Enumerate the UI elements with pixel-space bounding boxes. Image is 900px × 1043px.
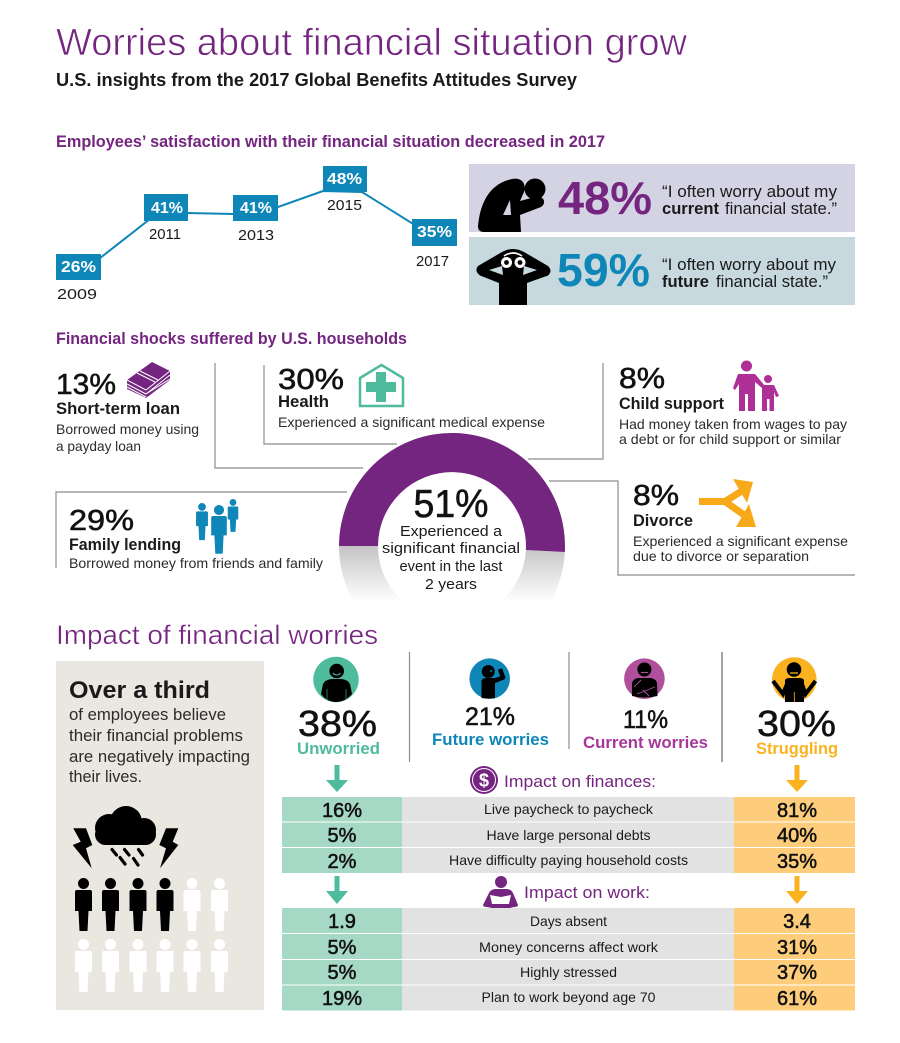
heading: impact on finances: [470, 766, 656, 794]
donut label: event in the last: [400, 558, 503, 575]
shock: short-term loan: Borrowed money using: [56, 421, 199, 437]
callout text: their lives.: [69, 768, 142, 786]
shock: family lending: [69, 499, 323, 571]
panel: current worry: [469, 164, 855, 232]
row: large personal debts: 5%: [328, 825, 357, 847]
shock: short-term loan: [56, 362, 199, 454]
row: difficulty paying household costs: Have difficulty paying household costs: [449, 852, 688, 868]
row: live paycheck to paycheck: 81%: [777, 800, 817, 822]
row: days absent: Days absent: [530, 913, 607, 929]
shock: divorce: [633, 479, 848, 564]
group: struggling: [756, 657, 838, 758]
callout heading: Over a third: [69, 677, 210, 704]
row: highly stressed: 5%: [328, 962, 357, 984]
icon: stack of money: [127, 362, 170, 398]
row: plan to work beyond age 70: Plan to work beyond age 70: [482, 989, 656, 1005]
column dividers: [410, 652, 722, 762]
label: future worries: Future worries: [432, 731, 549, 749]
data point 2013: [233, 195, 278, 244]
data point 2015: [323, 166, 367, 214]
row: difficulty paying household costs: 2%: [328, 851, 357, 873]
quote: future: “I often worry about my: [662, 256, 837, 274]
donut label: [382, 483, 520, 593]
shock: short-term loan: Short-term loan: [56, 400, 180, 418]
shock: child support: Had money taken from wages to pay: [619, 416, 847, 432]
shock: health: Health: [278, 393, 329, 411]
row: days absent: 1.9: [328, 911, 356, 933]
stat: 48%: 48%: [558, 172, 652, 224]
icon: smiling person: [313, 657, 359, 702]
icon: person looking ahead: [469, 658, 510, 699]
data point 2013: 2013: [238, 227, 274, 244]
data point 2017: 2017: [416, 253, 449, 270]
callout text: of employees believe: [69, 706, 226, 724]
row: highly stressed: [328, 962, 817, 984]
title: Worries about financial situation grow: [56, 22, 688, 64]
quote: current: current: [662, 200, 719, 218]
icon: person with binoculars: [476, 249, 550, 305]
shock: divorce: 8%: [633, 480, 679, 512]
row: large personal debts: [328, 825, 817, 847]
icon: person with head down: [478, 178, 546, 232]
panel: over a third: [56, 661, 264, 1010]
stat: 38%: 38%: [298, 703, 377, 744]
arrow: struggling to finances: [786, 765, 808, 792]
row: large personal debts: 40%: [777, 825, 817, 847]
icon: three people: [196, 499, 238, 554]
line chart: satisfaction by year: [56, 166, 457, 303]
stat: 21%: 21%: [465, 703, 515, 731]
arrow: unworried to finances: [326, 765, 348, 792]
shock: divorce: Experienced a significant expense: [633, 533, 848, 549]
heading: financial shocks: Financial shocks suffered by U.S. households: [56, 330, 407, 348]
donut label: Experienced a: [400, 523, 503, 540]
row: plan to work beyond age 70: 61%: [777, 988, 817, 1010]
data point 2017: 35%: [417, 224, 452, 241]
data point 2011: 41%: [151, 200, 183, 217]
data point 2015: 48%: [327, 171, 362, 188]
panel: future worry: [469, 237, 855, 305]
icon: storm cloud: [73, 806, 178, 868]
icon: person with folded arms: [624, 658, 665, 699]
row: money concerns affect work: [328, 937, 817, 959]
data point 2015: 2015: [327, 197, 362, 214]
heading: impact of financial worries: Impact of financial worries: [56, 620, 378, 650]
shock: health: Experienced a significant medical expense: [278, 414, 545, 430]
arrow: unworried to work: [326, 876, 348, 904]
data point 2011: 2011: [149, 226, 181, 243]
table: impact on finances: [282, 797, 855, 873]
row: money concerns affect work: 31%: [777, 937, 817, 959]
stat: 11%: 11%: [623, 706, 668, 734]
heading: impact on work: Impact on work:: [524, 884, 650, 902]
stat: 59%: 59%: [557, 244, 650, 296]
row: days absent: 3.4: [783, 911, 811, 933]
data point 2009: [56, 254, 101, 303]
connector lines: [56, 363, 855, 575]
donut chart: 51%: [339, 433, 565, 659]
quote: future: financial state.”: [716, 273, 828, 291]
arrow: struggling to work: [786, 876, 808, 904]
row: difficulty paying household costs: 35%: [777, 851, 817, 873]
shock: health: 30%: [278, 364, 344, 396]
quote: current: financial state.”: [725, 200, 837, 218]
shock: divorce: due to divorce or separation: [633, 548, 809, 564]
stat: 30%: 30%: [757, 703, 836, 744]
icon: dollar coin: $: [479, 770, 489, 790]
heading: impact on finances: Impact on finances:: [504, 773, 656, 791]
shock: child support: Child support: [619, 395, 724, 413]
icon: splitting arrow: [699, 479, 756, 527]
label: unworried: Unworried: [297, 740, 380, 758]
row: plan to work beyond age 70: 19%: [322, 988, 362, 1010]
row: difficulty paying household costs: [328, 851, 817, 873]
shock: family lending: Family lending: [69, 536, 181, 554]
donut label: significant financial: [382, 540, 520, 557]
callout text: are negatively impacting: [69, 748, 250, 766]
data point 2009: 2009: [57, 286, 97, 303]
row: highly stressed: Highly stressed: [520, 964, 617, 980]
row: live paycheck to paycheck: [322, 800, 817, 822]
shock: child support: [619, 360, 847, 447]
shock: short-term loan: 13%: [56, 369, 116, 401]
table: impact on work: [282, 908, 855, 1010]
data point 2017: [412, 219, 457, 270]
data point 2013: 41%: [240, 200, 272, 217]
shock: health: [278, 364, 545, 430]
group: unworried: [297, 657, 380, 758]
pictogram: people, first row: [75, 878, 228, 931]
label: struggling: Struggling: [756, 740, 838, 758]
icon: shrugging person: [772, 657, 817, 702]
donut label: 2 years: [425, 576, 477, 593]
donut label: 51%: [414, 483, 488, 526]
icon: person reading: [483, 876, 518, 908]
icon: adult and child: [733, 360, 779, 411]
shock: child support: 8%: [619, 363, 665, 395]
shock: family lending: 29%: [69, 505, 134, 537]
row: money concerns affect work: Money concerns affect work: [479, 939, 659, 955]
data point 2011: [144, 194, 188, 243]
shock: child support: a debt or for child support or similar: [619, 431, 841, 447]
quote: future: future: [662, 273, 709, 291]
row: large personal debts: Have large personal debts: [486, 827, 650, 843]
pictogram: people, second row: [75, 939, 228, 992]
shock: divorce: Divorce: [633, 512, 693, 530]
row: live paycheck to paycheck: Live paycheck to paycheck: [484, 801, 654, 817]
row: money concerns affect work: 5%: [328, 937, 357, 959]
row: live paycheck to paycheck: 16%: [322, 800, 362, 822]
data point 2009: 26%: [61, 259, 96, 276]
heading: impact on work: [483, 876, 650, 908]
heading: satisfaction: Employees’ satisfaction with their financial situation decreased in 2017: [56, 133, 605, 151]
callout text: their financial problems: [69, 727, 243, 745]
group: current worries: [583, 658, 708, 752]
icon: medical house: [360, 365, 403, 406]
label: current worries: Current worries: [583, 734, 708, 752]
row: plan to work beyond age 70: [322, 988, 817, 1010]
row: highly stressed: 37%: [777, 962, 817, 984]
quote: current: “I often worry about my: [662, 183, 838, 201]
icon: dollar coin: [470, 766, 498, 794]
subtitle: U.S. insights from the 2017 Global Benefits Attitudes Survey: [56, 70, 577, 90]
row: days absent: [328, 911, 811, 933]
group: future worries: [432, 658, 549, 749]
shock: family lending: Borrowed money from friends and family: [69, 555, 323, 571]
shock: short-term loan: a payday loan: [56, 438, 141, 454]
